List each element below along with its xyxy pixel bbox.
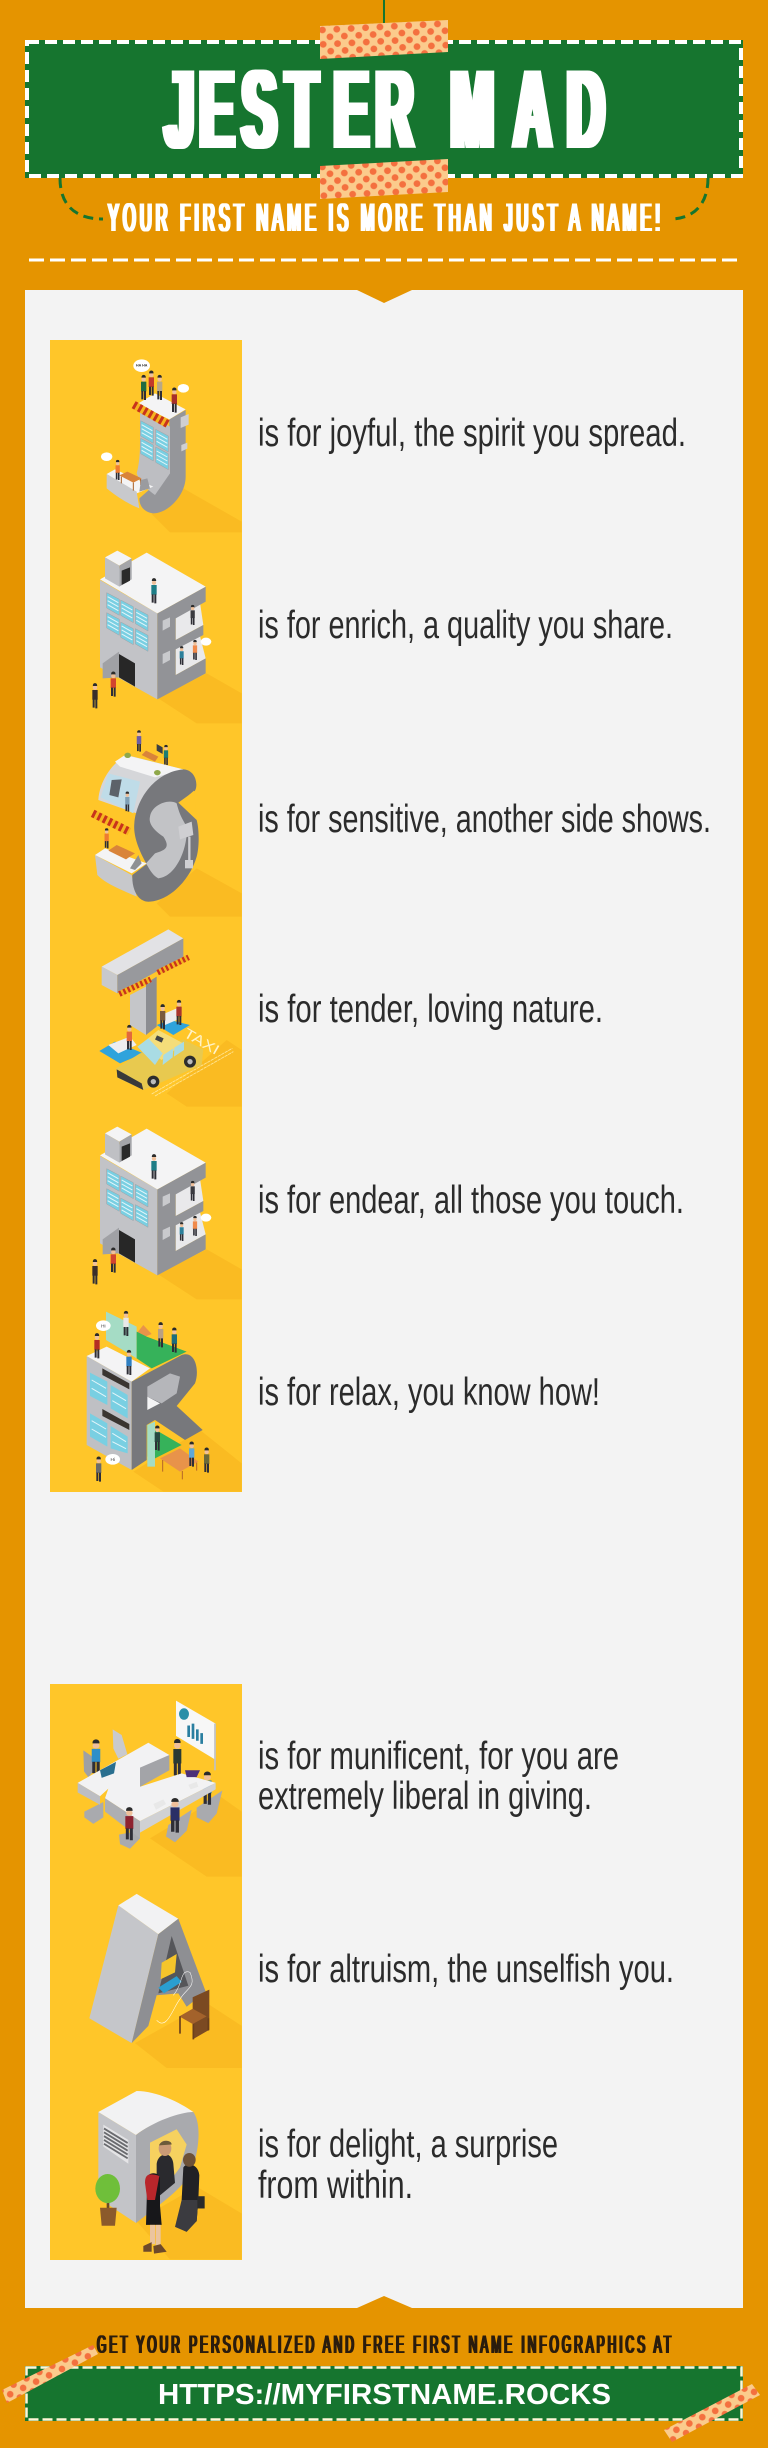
yellow column: MAD <box>50 1684 242 2260</box>
text: M: extremely liberal in giving. <box>258 1775 592 1818</box>
icon: letter R: Hi <box>101 1323 106 1328</box>
icon: letter T with taxi: TAXI <box>181 1025 222 1058</box>
title banner <box>25 40 743 178</box>
icon: letter A <box>89 1894 242 2068</box>
icon: letter R <box>87 1311 242 1492</box>
text: M <box>258 1735 619 1818</box>
icon: letter T with taxi <box>99 929 242 1107</box>
text: T: is for tender, loving nature. <box>258 988 603 1031</box>
footer banner <box>25 2366 743 2421</box>
icon: letter J: HA HA <box>136 364 148 368</box>
icon: letter E <box>92 551 242 723</box>
yellow column: JESTER <box>50 340 242 1492</box>
left dashed swirl <box>60 178 103 219</box>
icon: letter R: Hi <box>110 1457 115 1462</box>
icon: letter E (repeat) <box>92 1127 242 1299</box>
footer URL: HTTPS://MYFIRSTNAME.ROCKS <box>158 2379 611 2411</box>
text: R: is for relax, you know how! <box>258 1371 600 1414</box>
icon: letter J <box>101 359 242 532</box>
thin hanging line <box>383 0 385 24</box>
icon: letter S <box>93 730 242 917</box>
text: D: from within. <box>258 2164 413 2207</box>
title: JESTER MAD <box>165 48 604 172</box>
tape: top of banner <box>320 20 448 59</box>
tape: bottom of banner <box>320 159 448 199</box>
panel: letters <box>25 290 743 2308</box>
icon: letter M meeting table <box>78 1701 242 1877</box>
icon: letter D <box>95 2091 242 2259</box>
text: D: is for delight, a surprise <box>258 2123 558 2166</box>
tape: footer left <box>2 2345 98 2403</box>
text: M: is for munificent, for you are <box>258 1735 619 1778</box>
right dashed swirl <box>670 178 708 219</box>
text: D <box>258 2123 558 2207</box>
tape: footer right <box>664 2384 760 2442</box>
